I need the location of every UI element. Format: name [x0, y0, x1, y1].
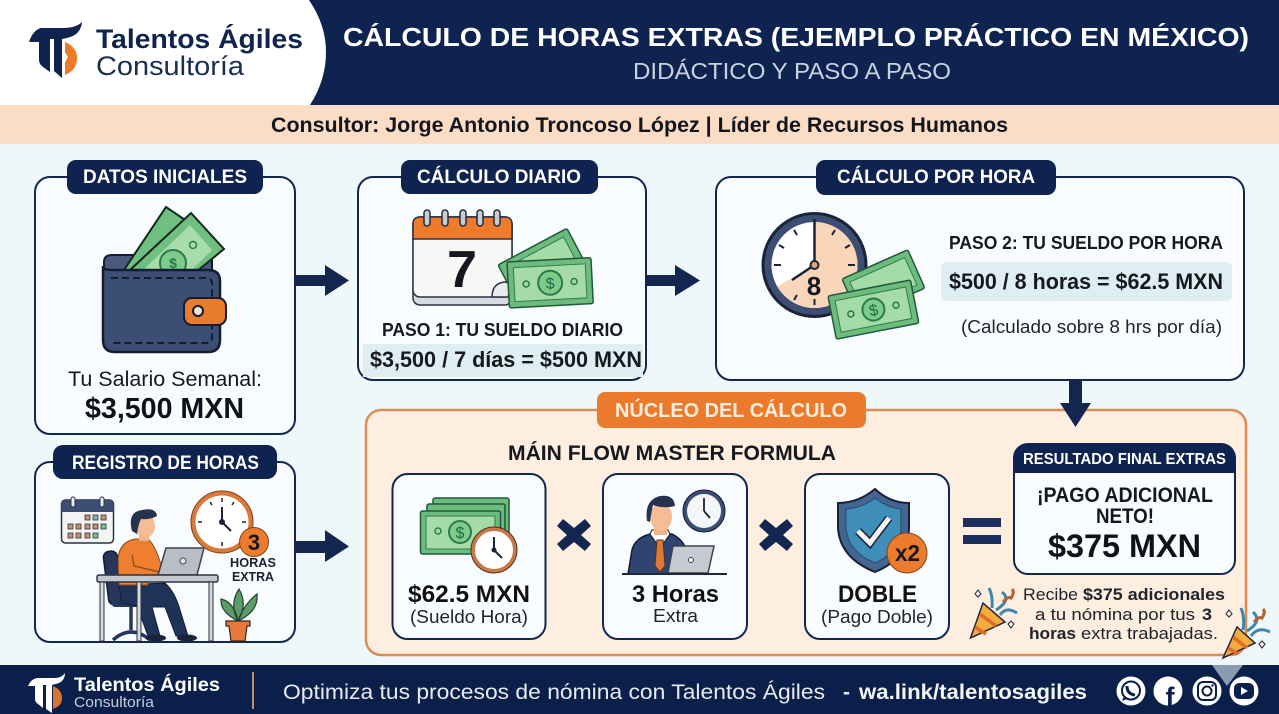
operator: multiply — [759, 519, 793, 551]
icon: plant — [221, 589, 257, 641]
consultant bar — [0, 105, 1279, 144]
icon: youtube — [1230, 676, 1258, 706]
panel: datos iniciales — [35, 160, 295, 434]
panel: cálculo diario — [358, 160, 646, 380]
text: pago adicional neto — [1037, 484, 1213, 528]
card: resultado final — [1014, 444, 1235, 574]
arrow: datos to cálculo diario — [296, 265, 349, 296]
icon: clock 8: 8 — [807, 271, 821, 301]
icon: calendar 7: 7 — [447, 241, 477, 299]
caption: extra: Extra — [653, 606, 699, 626]
icon: overtime clock — [191, 491, 253, 553]
icon: person at laptop — [103, 509, 204, 642]
caption: sueldo hora: (Sueldo Hora) — [410, 607, 528, 627]
text: resumen del pago — [1023, 585, 1225, 643]
operator: multiply — [557, 519, 591, 551]
heading: resultado final extras — [1014, 444, 1235, 473]
icon: shield — [838, 489, 909, 572]
heading: núcleo del cálculo: NÚCLEO DEL CÁLCULO — [615, 398, 847, 422]
icon: facebook: f — [1166, 682, 1176, 712]
footer logo — [28, 673, 220, 713]
heading: datos iniciales: DATOS INICIALES — [83, 167, 247, 188]
text: resumen del pago: 3 — [1202, 605, 1212, 624]
icon: money and clock: $ — [456, 525, 465, 542]
label: horas extra: EXTRA — [232, 569, 275, 584]
value: 3 horas: 3 Horas — [632, 581, 719, 608]
panel: cálculo por hora — [716, 160, 1244, 380]
operator: equals — [963, 518, 1001, 544]
heading: master formula: MÁIN FLOW MASTER FORMULA — [508, 442, 836, 465]
heading: cálculo diario — [401, 160, 598, 194]
icon: facebook — [1154, 676, 1182, 712]
text: resumen del pago: Recibe — [1023, 585, 1078, 604]
icon: calendar — [62, 497, 114, 543]
icon: calendar 7 — [413, 210, 512, 305]
header banner — [0, 0, 1279, 105]
icon: bills: $ — [545, 276, 555, 293]
label: horas extra — [230, 555, 276, 584]
badge: x2: x2 — [895, 540, 920, 566]
icon: clock 8 — [764, 214, 866, 316]
heading: datos iniciales — [67, 160, 263, 194]
formula: sueldo por hora: $500 / 8 horas = $62.5 MXN — [949, 269, 1223, 294]
heading: cálculo por hora: CÁLCULO POR HORA — [837, 166, 1035, 188]
logo: Talentos Ágiles — [29, 22, 303, 81]
number: salario: $3,500 MXN — [85, 393, 244, 425]
icon: wallet with bills — [103, 207, 226, 352]
arrow: registro to núcleo — [296, 530, 349, 562]
value: doble: DOBLE — [838, 581, 917, 608]
arrow: cálculo diario to por hora — [646, 265, 700, 296]
formula: sueldo por hora — [941, 262, 1232, 301]
footer link: - — [843, 681, 850, 704]
text: pago adicional neto: ¡PAGO ADICIONAL — [1037, 484, 1213, 507]
icon: money and clock — [420, 498, 517, 573]
note: 8 horas por día: (Calculado sobre 8 hrs por día) — [961, 317, 1222, 337]
text: resumen del pago: horas — [1029, 624, 1076, 643]
card: doble — [805, 474, 949, 639]
footer logo: Talentos Ágiles — [74, 674, 220, 696]
icon: bills — [498, 228, 593, 308]
caption: pago doble: (Pago Doble) — [821, 607, 933, 627]
icon: wallet with bills: $ — [169, 255, 177, 271]
text: paso 2: PASO 2: TU SUELDO POR HORA — [949, 233, 1223, 253]
icon: whatsapp — [1116, 676, 1146, 706]
text: resumen del pago: extra trabajadas. — [1081, 624, 1218, 643]
icon: party popper right — [1223, 608, 1270, 658]
formula: sueldo diario: $3,500 / 7 días = $500 MXN — [370, 347, 642, 372]
text: resumen del pago: $375 adicionales — [1083, 585, 1225, 604]
footer — [0, 665, 1279, 714]
icon: bills: $ — [868, 302, 880, 320]
badge: x2 — [887, 533, 927, 573]
text: resumen del pago: a tu nómina por tus — [1035, 605, 1195, 624]
pin pointer — [1212, 665, 1243, 686]
heading: cálculo por hora — [816, 160, 1056, 195]
footer link: wa.link/talentosagiles — [858, 681, 1087, 704]
consultant bar: Consultor: Jorge Antonio Troncoso López | Líder de Recursos Humanos — [271, 114, 1008, 137]
badge: 3 horas: 3 — [248, 530, 260, 555]
logo: Talentos Ágiles: Talentos Ágiles — [96, 23, 303, 54]
heading: registro de horas: REGISTRO DE HORAS — [72, 453, 259, 474]
card: 3 horas — [603, 474, 747, 639]
heading: cálculo diario: CÁLCULO DIARIO — [417, 166, 581, 188]
icon: desk — [97, 575, 218, 641]
heading: núcleo del cálculo — [597, 392, 866, 428]
text: salario semanal: Tu Salario Semanal: — [68, 368, 262, 391]
title: CÁLCULO DE HORAS EXTRAS (EJEMPLO PRÁCTICO EN MÉXICO) — [343, 22, 1249, 52]
arrow: por hora to resultado — [1060, 380, 1091, 427]
heading: resultado final extras: RESULTADO FINAL EXTRAS — [1023, 451, 1226, 468]
icon: instagram — [1192, 676, 1222, 706]
label: horas extra: HORAS — [230, 555, 276, 570]
logo: Talentos Ágiles: Consultoría — [96, 51, 245, 81]
footer logo: Consultoría — [74, 694, 155, 711]
badge: 3 horas — [240, 528, 268, 556]
subtitle: DIDÁCTICO Y PASO A PASO — [633, 58, 951, 84]
icon: worker and clock — [622, 490, 727, 574]
heading: registro de horas — [53, 445, 277, 479]
panel: registro de horas — [35, 445, 295, 642]
value: 62.5: $62.5 MXN — [408, 581, 530, 608]
icon: party popper left — [970, 588, 1017, 638]
value: 375 MXN: $375 MXN — [1048, 528, 1201, 564]
footer message: Optimiza tus procesos de nómina con Talentos Ágiles — [283, 681, 825, 704]
card: sueldo hora — [392, 474, 546, 639]
text: paso 1: PASO 1: TU SUELDO DIARIO — [382, 320, 623, 340]
panel: núcleo del cálculo — [366, 392, 1246, 655]
icon: bills — [828, 250, 925, 339]
text: pago adicional neto: NETO! — [1096, 505, 1154, 528]
